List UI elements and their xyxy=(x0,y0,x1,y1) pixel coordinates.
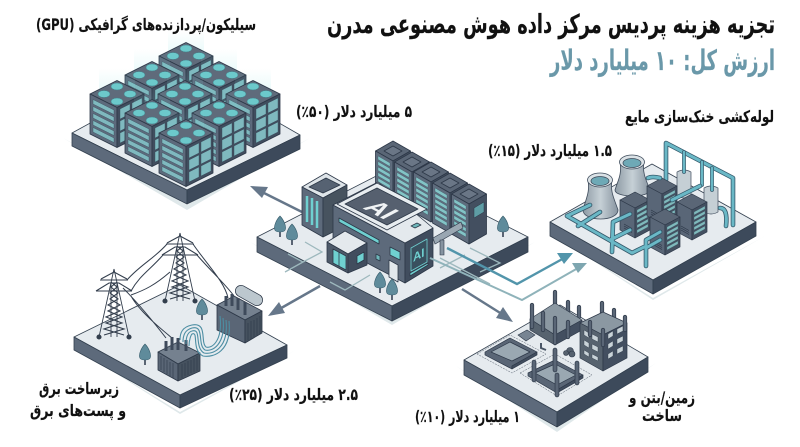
value: cooling: ۱.۵ میلیارد دلار (۱۵٪) xyxy=(488,141,612,160)
value: GPU: ۵ میلیارد دلار (۵۰٪) xyxy=(296,102,412,121)
platform: cooling xyxy=(543,164,765,300)
bus cables xyxy=(180,316,229,356)
label: power: و پست‌های برق xyxy=(30,401,126,421)
annex xyxy=(327,231,367,273)
server row xyxy=(376,141,486,244)
tree xyxy=(139,344,151,365)
cooling racks xyxy=(620,178,707,255)
materials xyxy=(518,330,575,357)
main building xyxy=(333,182,433,283)
label: power xyxy=(30,379,126,421)
connector pipe xyxy=(433,222,463,255)
panel: liquid cooling xyxy=(543,143,765,300)
panel: power infrastructure xyxy=(66,233,296,414)
GPU server racks xyxy=(90,30,280,186)
platform: power xyxy=(66,285,296,414)
foundation pit xyxy=(477,335,546,373)
transmission towers xyxy=(96,233,198,339)
circuit lines xyxy=(285,242,500,290)
arrow: to GPU panel xyxy=(250,186,302,212)
label: GPU: سیلیکون/پردازنده‌های گرافیکی (GPU) xyxy=(36,15,256,35)
panel: land and construction xyxy=(456,292,656,432)
AI roof lettering: AI xyxy=(357,198,404,223)
platform: GPU xyxy=(63,70,310,210)
arrow: teal flows to cooling panel xyxy=(430,248,587,300)
cooling towers xyxy=(583,155,650,219)
label: power: زیرساخت برق xyxy=(39,379,119,398)
label: land xyxy=(628,388,695,425)
tanks and overhead pipes xyxy=(666,143,733,226)
building under construction back xyxy=(530,292,582,345)
platform: land xyxy=(456,305,656,432)
value: power: ۲.۵ میلیارد دلار (۲۵٪) xyxy=(229,385,358,404)
coolant pipes xyxy=(567,177,700,266)
platform: campus xyxy=(250,168,535,325)
tree xyxy=(196,299,208,320)
AI sign on wall: AI xyxy=(413,245,424,265)
panel: central AI campus xyxy=(250,141,535,325)
concrete frame foundation xyxy=(520,350,592,396)
value: land: ۱ میلیارد دلار (۱۰٪) xyxy=(415,407,520,426)
transformer right xyxy=(217,291,262,343)
arrow: to land panel xyxy=(462,289,513,322)
label: land: زمین/بتن و xyxy=(628,388,695,407)
building under construction front xyxy=(580,303,627,371)
transformer left xyxy=(158,337,200,381)
trees xyxy=(274,216,509,300)
panel: GPU silicon xyxy=(63,30,310,210)
arrow: to power panel xyxy=(268,286,320,316)
label: land: ساخت xyxy=(642,406,682,425)
left tower xyxy=(302,173,347,237)
power lines xyxy=(123,244,234,338)
